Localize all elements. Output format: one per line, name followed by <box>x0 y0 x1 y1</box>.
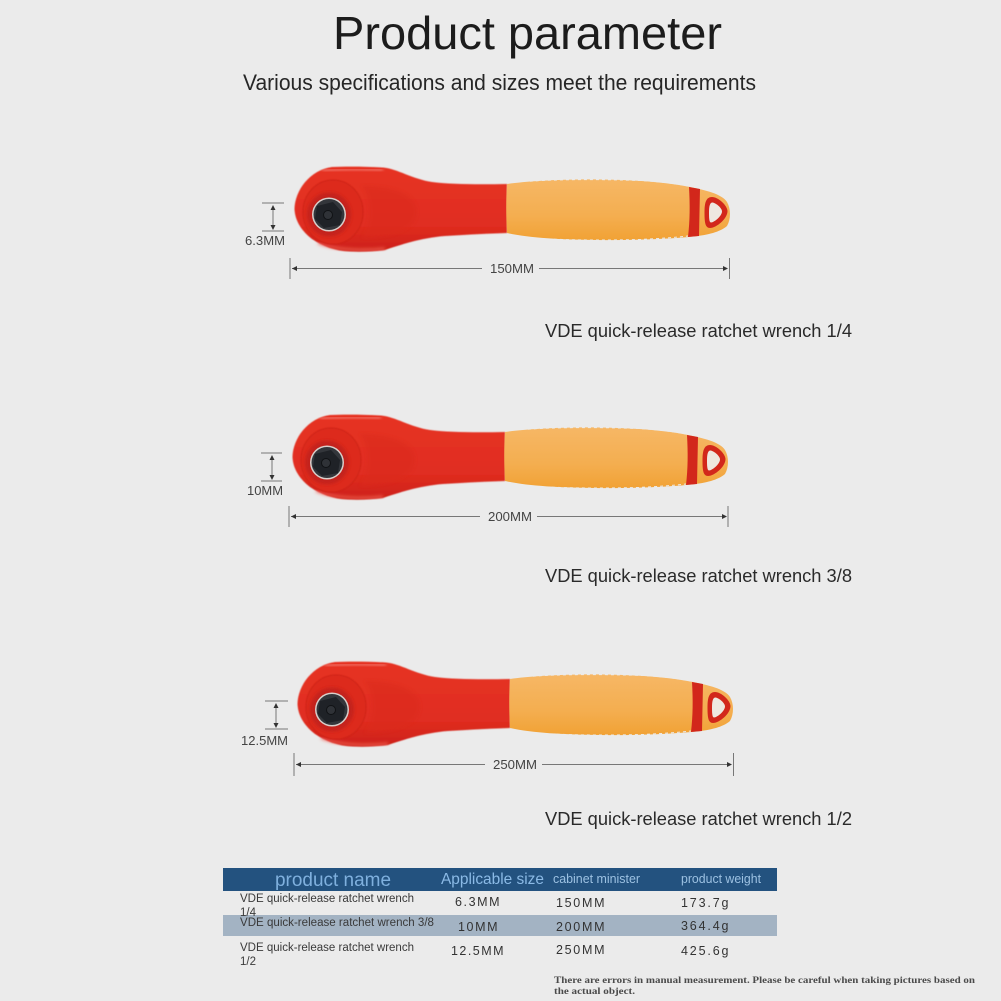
row: 3/8 <box>240 917 730 934</box>
row: 3/8: 200MM <box>556 920 606 934</box>
dimension: 150MM length: 150MM <box>490 262 534 276</box>
panel: wrench 1/2 <box>241 662 852 829</box>
dimension: 200MM length <box>289 506 728 527</box>
dimension: 12.5MM socket size <box>241 701 288 748</box>
row: 1/4 <box>240 893 730 919</box>
row: 3/8: VDE quick-release ratchet wrench 3/8 <box>240 917 434 929</box>
subtitle: Various specifications and sizes meet the requirements <box>243 70 756 95</box>
illustration: 1/4 ratchet wrench <box>294 167 730 252</box>
row: 1/4: 1/4 <box>240 907 257 919</box>
row: 1/2: 12.5MM <box>451 944 505 958</box>
row: 1/4: 150MM <box>556 896 606 910</box>
dimension: 6.3MM socket size: 6.3MM <box>245 234 285 248</box>
caption: wrench 1/4: VDE quick-release ratchet wrench 1/4 <box>545 321 852 341</box>
row: 1/4: 6.3MM <box>455 895 501 909</box>
caption: wrench 1/2: VDE quick-release ratchet wrench 1/2 <box>545 809 852 829</box>
illustration: 3/8 ratchet wrench <box>292 415 728 500</box>
dimension: 10MM socket size <box>247 453 283 498</box>
table header <box>223 868 777 891</box>
table header: product name <box>275 870 391 891</box>
dimension: 150MM length <box>290 258 730 279</box>
row: 3/8: 364.4g <box>681 919 730 933</box>
row: 1/4: VDE quick-release ratchet wrench <box>240 893 414 905</box>
row: 1/2: 1/2 <box>240 956 256 968</box>
row: 1/2: 250MM <box>556 943 606 957</box>
row: 1/2: VDE quick-release ratchet wrench <box>240 942 414 954</box>
row: 3/8: 10MM <box>458 920 499 934</box>
dimension: 12.5MM socket size: 12.5MM <box>241 734 288 748</box>
table header: Applicable size <box>441 871 544 888</box>
footnote: There are errors in manual measurement. Please be careful when taking pictures based on <box>554 976 976 986</box>
table header: cabinet minister <box>553 872 640 886</box>
row: 1/2: 425.6g <box>681 944 730 958</box>
footnote: the actual object. <box>554 987 635 997</box>
specification table <box>223 868 777 968</box>
title: Product parameter <box>333 7 722 59</box>
row: 1/4: 173.7g <box>681 896 730 910</box>
illustration: 1/2 ratchet wrench <box>298 662 733 747</box>
dimension: 10MM socket size: 10MM <box>247 484 283 498</box>
panel: wrench 3/8 <box>247 415 852 586</box>
footnote <box>554 976 976 997</box>
dimension: 200MM length: 200MM <box>488 510 532 524</box>
table header: product weight <box>681 872 762 886</box>
row: 1/2 <box>240 942 730 968</box>
caption: wrench 3/8: VDE quick-release ratchet wrench 3/8 <box>545 566 852 586</box>
panel: wrench 1/4 <box>245 167 852 341</box>
dimension: 250MM length: 250MM <box>493 758 537 772</box>
dimension: 250MM length <box>294 753 734 776</box>
table row band <box>223 915 777 936</box>
dimension: 6.3MM socket size <box>245 203 285 248</box>
